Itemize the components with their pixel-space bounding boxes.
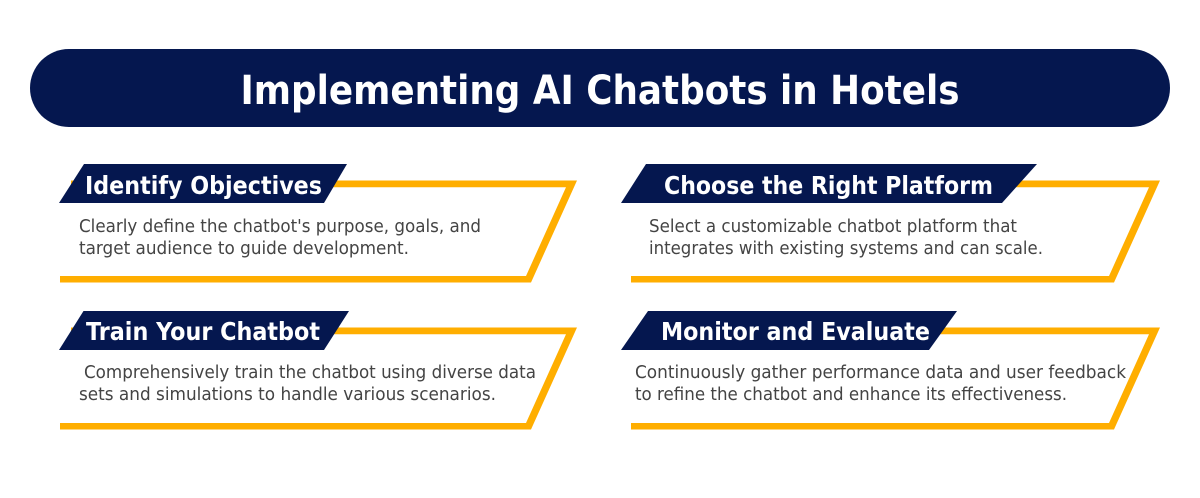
panel: identify objectives: Identify Objectives <box>85 171 322 200</box>
panel: choose the right platform: Choose the Right Platform <box>664 171 993 200</box>
panel: monitor and evaluate <box>621 311 1160 430</box>
panel: monitor and evaluate: Continuously gather performance data and user feedback <box>635 362 1127 383</box>
title banner <box>30 49 1170 127</box>
panel: train your chatbot: sets and simulations to handle various scenarios. <box>79 384 496 405</box>
panel: train your chatbot: Comprehensively train the chatbot using diverse data <box>84 362 536 383</box>
panel: monitor and evaluate: Monitor and Evaluate <box>661 317 930 346</box>
panel: identify objectives: target audience to guide development. <box>79 238 409 259</box>
panel: identify objectives: Clearly define the chatbot's purpose, goals, and <box>79 216 481 237</box>
panel: train your chatbot <box>59 311 577 430</box>
panel: identify objectives <box>59 164 577 282</box>
panel: train your chatbot: Train Your Chatbot <box>86 317 320 346</box>
panel: choose the right platform <box>621 164 1160 282</box>
panel: choose the right platform: integrates with existing systems and can scale. <box>649 238 1043 259</box>
panel: monitor and evaluate: to refine the chatbot and enhance its effectiveness. <box>635 384 1067 405</box>
title: Implementing AI Chatbots in Hotels <box>240 68 960 114</box>
panel: choose the right platform: Select a customizable chatbot platform that <box>649 216 1017 237</box>
